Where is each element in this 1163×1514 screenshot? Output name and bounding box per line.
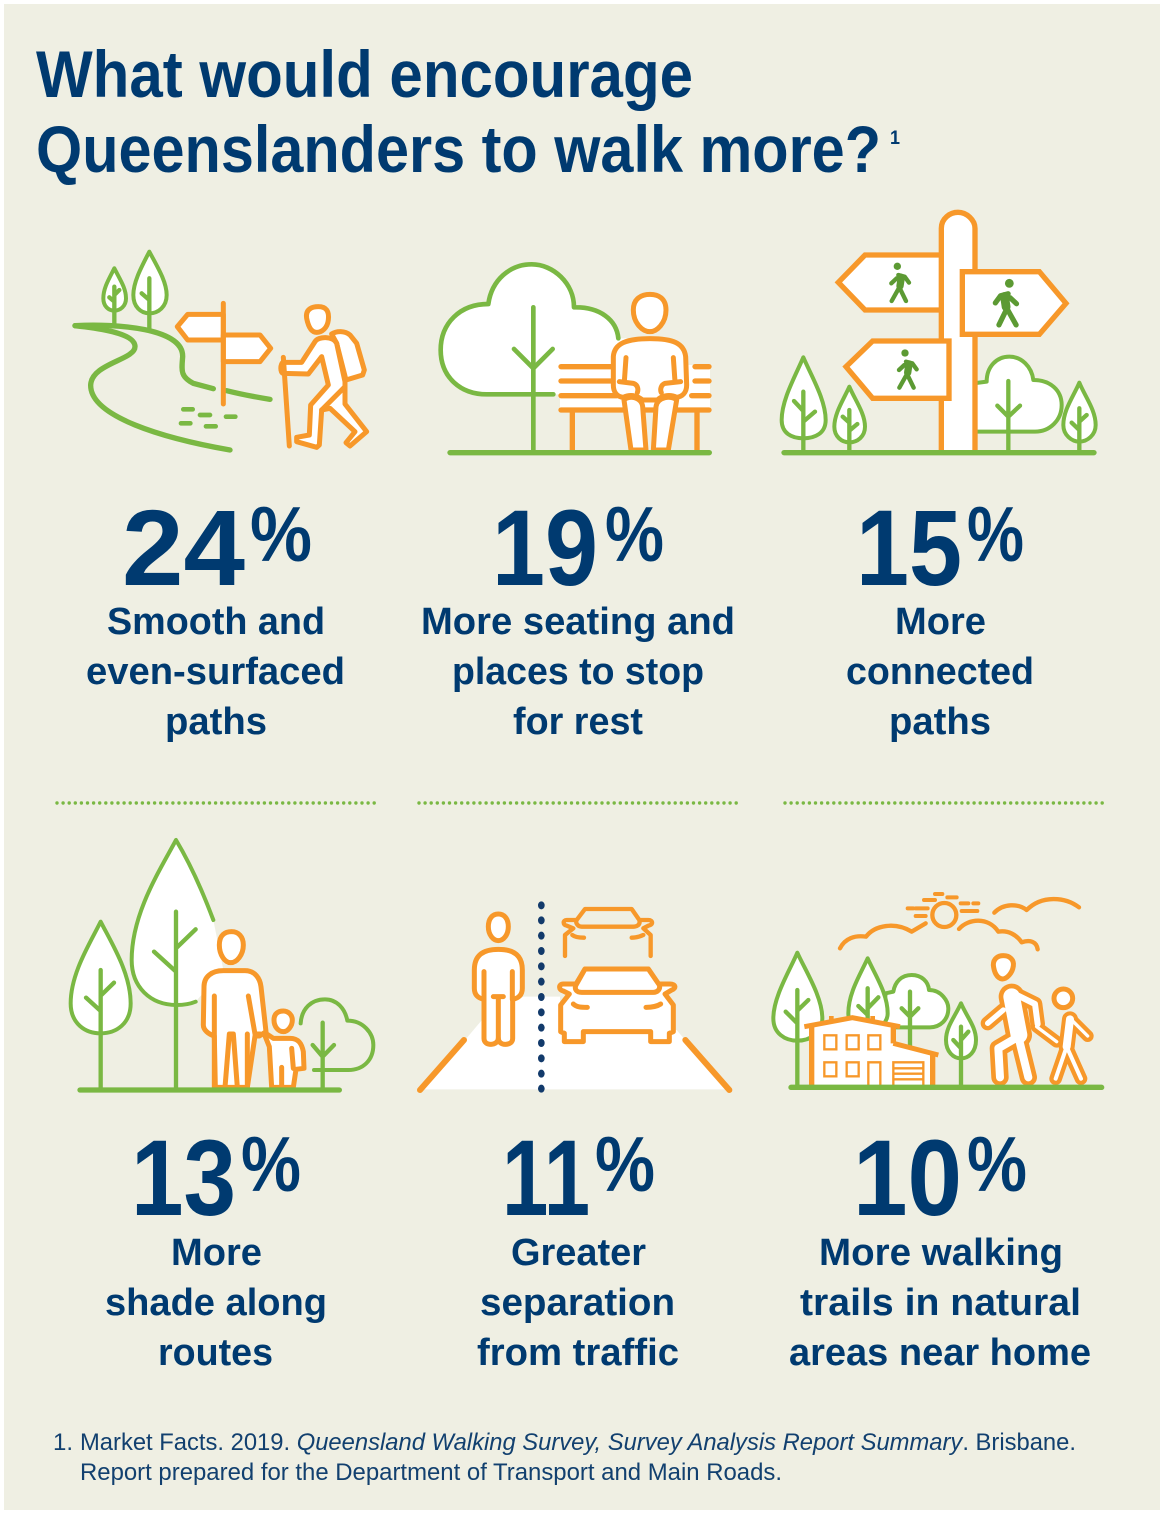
statistic: 24 percent [122, 487, 312, 608]
statistic: 15 percent: % [967, 490, 1024, 578]
label: seating [421, 601, 735, 743]
statistic: 11 percent: % [595, 1120, 655, 1208]
label: smooth paths [86, 601, 345, 743]
label: smooth paths: paths [165, 701, 267, 743]
label: smooth paths: even-surfaced [86, 651, 345, 693]
statistic: 11 percent: 11 [502, 1117, 590, 1238]
icon: adult and child among shade trees [71, 840, 373, 1090]
statistic: 24 percent: 24 [122, 487, 245, 608]
icon: hiker on winding path with signpost [75, 252, 367, 450]
dotted dividers [57, 801, 1103, 805]
label: walking trails: More walking [819, 1232, 1063, 1274]
footnote: Market Facts. 2019. Queensland Walking Survey, Survey Analysis Report Summary. Brisbane. [80, 1429, 1076, 1456]
label: connected paths [846, 601, 1034, 743]
label: connected paths: More [895, 601, 986, 643]
title: Queenslanders to walk more? [36, 112, 881, 186]
label: seating: places to stop [452, 651, 704, 693]
label: traffic separation: separation [480, 1282, 675, 1324]
label: walking trails: areas near home [789, 1332, 1091, 1374]
statistic: 10 percent: 10 [853, 1117, 962, 1238]
statistic: 19 percent [492, 487, 664, 608]
footnote: Report prepared for the Department of Transport and Main Roads. [80, 1459, 782, 1486]
label: walking trails: trails in natural [800, 1282, 1081, 1324]
title [36, 37, 900, 186]
icon: pedestrian separated from cars [420, 901, 729, 1093]
icon: walker on top-left sign [891, 263, 909, 301]
label: walking trails [789, 1232, 1091, 1374]
icon: walker on right sign [995, 279, 1017, 325]
footnote [53, 1429, 1076, 1486]
label: traffic separation: Greater [511, 1232, 646, 1274]
label: traffic separation: from traffic [477, 1332, 679, 1374]
icon: family walking near house and trees [773, 894, 1102, 1087]
statistic: 13 percent: 13 [131, 1117, 236, 1238]
statistic: 10 percent [853, 1117, 1027, 1238]
icon: person resting on a park bench [441, 264, 710, 453]
icon: directional signposts among trees [782, 212, 1096, 453]
title: What would encourage [36, 37, 693, 111]
label: smooth paths: Smooth and [107, 601, 325, 643]
label: shade: routes [158, 1332, 273, 1374]
statistic: 13 percent: % [241, 1120, 301, 1208]
label: shade: shade along [105, 1282, 327, 1324]
statistic: 10 percent: % [967, 1120, 1027, 1208]
label: shade: More [171, 1232, 262, 1274]
label: shade [105, 1232, 327, 1374]
label: seating: More seating and [421, 601, 735, 643]
statistic: 19 percent: 19 [492, 487, 598, 608]
label: connected paths: paths [889, 701, 991, 743]
statistic: 15 percent: 15 [856, 487, 962, 608]
label: seating: for rest [513, 701, 643, 743]
footnote: 1. [53, 1429, 73, 1456]
statistic: 19 percent: % [605, 490, 664, 578]
label: traffic separation [477, 1232, 679, 1374]
statistic: 24 percent: % [250, 490, 312, 578]
icon: walker on lower-left sign [899, 349, 917, 388]
title: 1 [890, 128, 900, 149]
label: connected paths: connected [846, 651, 1034, 693]
